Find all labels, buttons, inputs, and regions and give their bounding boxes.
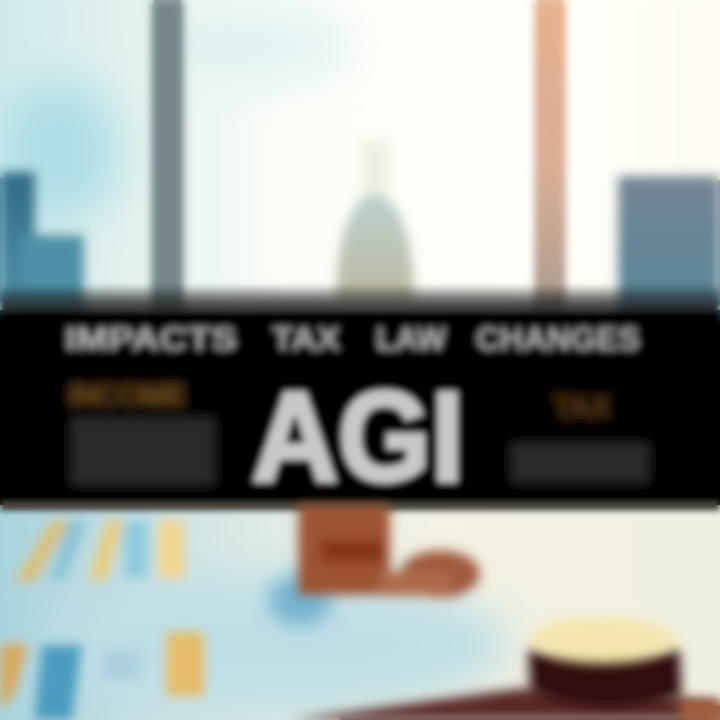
window base shadow: [0, 284, 720, 324]
heading: impacts tax law changes: TAX: [272, 320, 340, 357]
teal sky haze: [0, 80, 120, 220]
panel: black title band: [0, 312, 720, 509]
capitol dome: [336, 140, 414, 300]
column: grey left: [151, 0, 184, 310]
heading: impacts tax law changes: IMPACTS: [65, 320, 237, 357]
icon: wooden gavel: [298, 505, 480, 598]
building: left skyline: [0, 172, 84, 315]
chart stripes: lower row: [0, 632, 204, 720]
column: copper right: [534, 0, 566, 310]
heading: impacts tax law changes: [65, 320, 640, 357]
right wood corner: [680, 700, 720, 720]
pale sky haze top: [170, 5, 350, 85]
text block: right description: [510, 442, 650, 484]
gavel shadow: [268, 574, 332, 626]
panel: skyline background photo: [0, 0, 720, 324]
desk surface: [0, 512, 720, 720]
desk back edge: [0, 502, 720, 512]
building: right skyline: [618, 176, 720, 316]
document lower tint: [50, 575, 510, 715]
icon: coin stack: [528, 617, 682, 707]
heading: impacts tax law changes: LAW: [376, 320, 447, 357]
heading: right amber label: TAX: [553, 389, 612, 425]
heading: left amber label: INCOME: [68, 377, 186, 413]
heading: AGI: AGI: [252, 366, 464, 509]
heading: impacts tax law changes: CHANGES: [476, 320, 640, 357]
dark wood table edge: [290, 688, 720, 720]
text block: left description: [70, 416, 216, 486]
panel: desk with tax documents: [0, 502, 720, 720]
chart stripes: upper row: [14, 520, 184, 582]
